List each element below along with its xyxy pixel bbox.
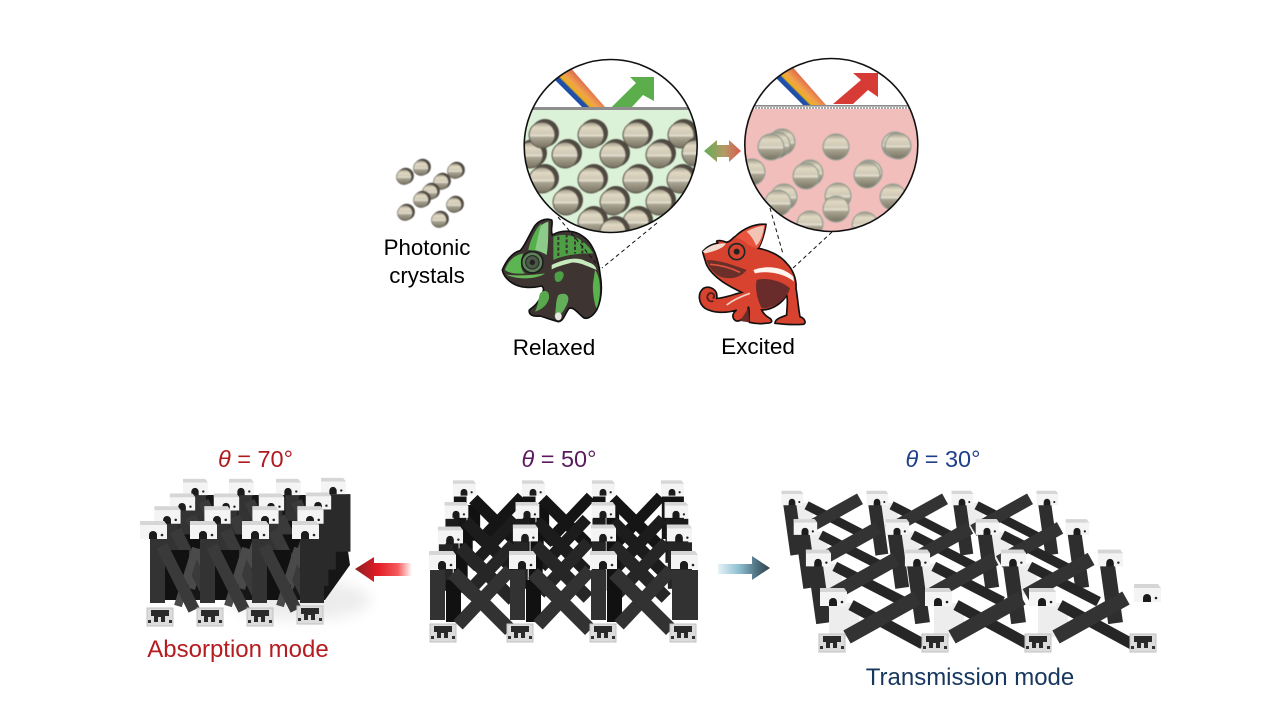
icon: photonic crystal spheres [396, 159, 465, 228]
spheres: tightly packed lattice [525, 118, 696, 232]
rainbow incident beam [776, 68, 826, 105]
structure: intermediate lattice [429, 480, 698, 642]
panel: relaxed magnified circle [523, 58, 698, 234]
rainbow incident beam [556, 70, 605, 107]
heading: theta 70: θ = 70° [218, 446, 293, 472]
label: photonic crystals: Photonic [384, 235, 470, 260]
label: photonic crystals: crystals [389, 263, 465, 288]
structure: transmission mode lattice [781, 491, 1161, 652]
arrow: red to absorption [355, 557, 412, 582]
spheres: widely spaced lattice [746, 128, 912, 230]
heading: theta 30: θ = 30° [905, 446, 981, 472]
arrow: blue to transmission [718, 556, 770, 580]
dashed lines: relaxed zoom [558, 217, 657, 268]
label: transmission mode: Transmission mode [866, 664, 1074, 691]
dashed lines: excited zoom [770, 208, 832, 268]
red reflected arrow [833, 73, 878, 104]
heading: theta 50: θ = 50° [521, 446, 597, 472]
label: absorption mode: Absorption mode [147, 636, 329, 663]
label: excited: Excited [721, 334, 795, 359]
green reflected arrow [612, 77, 654, 107]
panel: excited magnified circle [744, 58, 919, 232]
illustration: red excited chameleon [699, 224, 805, 325]
illustration: green relaxed chameleon [502, 219, 601, 322]
arrow: reversible green to red [704, 140, 741, 162]
label: relaxed: Relaxed [513, 335, 595, 360]
structure: absorption mode lattice [140, 478, 370, 626]
